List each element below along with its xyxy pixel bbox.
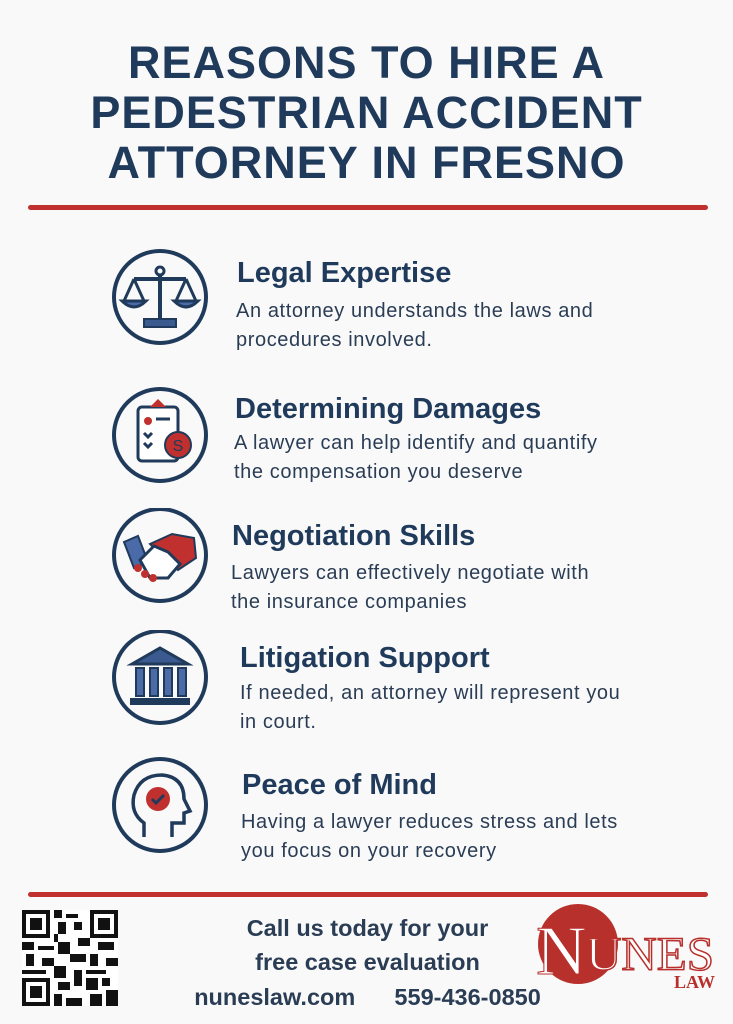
description: the compensation you deserve: [234, 461, 523, 483]
description: you focus on your recovery: [241, 840, 497, 862]
logo: Nunes Law: UNES: [586, 928, 714, 981]
logo: Nunes Law: LAW: [674, 972, 715, 992]
description: If needed, an attorney will represent you: [240, 682, 620, 704]
heading: Determining Damages: [235, 393, 541, 425]
description: [240, 682, 620, 733]
QR code: [22, 910, 118, 1006]
title: [90, 37, 643, 188]
description: An attorney understands the laws and: [236, 300, 593, 322]
item: determining damages: [112, 387, 598, 483]
item: legal expertise: [112, 249, 593, 351]
description: in court.: [240, 711, 317, 733]
description: [231, 562, 589, 613]
item: litigation: [112, 630, 620, 733]
heading: Litigation Support: [240, 642, 490, 674]
heading: Negotiation Skills: [232, 520, 475, 552]
title: ATTORNEY IN FRESNO: [107, 137, 626, 188]
description: Lawyers can effectively negotiate with: [231, 562, 589, 584]
description: Having a lawyer reduces stress and lets: [241, 811, 618, 833]
title: PEDESTRIAN ACCIDENT: [90, 87, 643, 138]
description: [241, 811, 618, 862]
icon: scales: [112, 249, 208, 345]
item: peace of mind: [112, 757, 618, 862]
description: [236, 300, 593, 351]
description: the insurance companies: [231, 591, 467, 613]
icon: courthouse: [112, 630, 208, 725]
heading: Peace of Mind: [242, 769, 437, 801]
item: negotiation: [112, 508, 589, 613]
logo: Nunes Law: [536, 904, 715, 992]
icon: head: [112, 757, 208, 853]
icon: clipboard: [112, 387, 208, 483]
title: REASONS TO HIRE A: [128, 37, 605, 88]
logo: Nunes Law: N: [536, 913, 587, 990]
description: procedures involved.: [236, 329, 433, 351]
icon: handshake: [112, 508, 208, 603]
call to action: Call us today for your: [247, 915, 488, 941]
description: A lawyer can help identify and quantify: [234, 432, 598, 454]
text: free case evaluation: [255, 949, 480, 975]
heading: Legal Expertise: [237, 257, 451, 289]
description: [234, 432, 598, 483]
contact info: nuneslaw.com 559-436-0850: [194, 984, 541, 1010]
icon: clipboard: S: [173, 438, 183, 455]
